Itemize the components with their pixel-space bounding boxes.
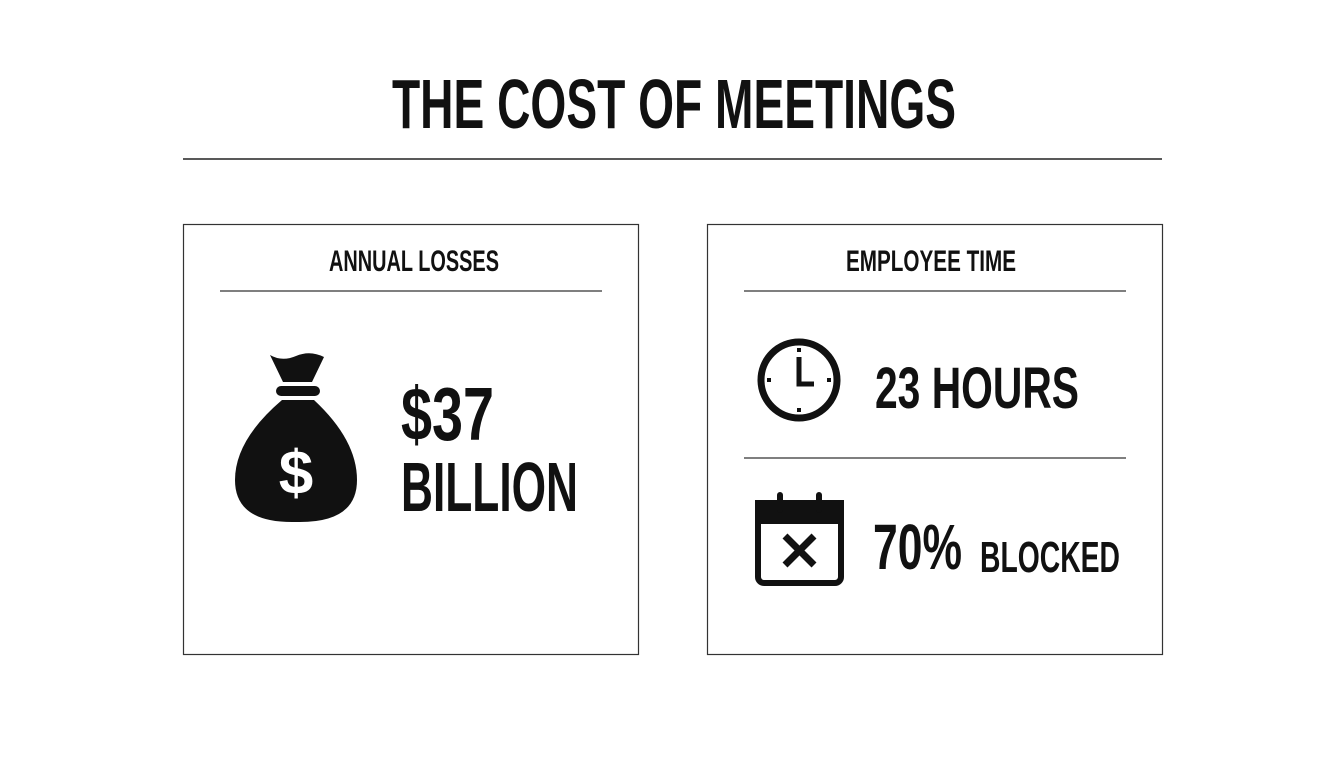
heading: annual losses: ANNUAL LOSSES bbox=[329, 245, 499, 278]
stat: 70% blocked: 70% bbox=[873, 511, 962, 583]
icon: money bag bbox=[235, 353, 357, 522]
stat: $37 billion bbox=[401, 372, 578, 526]
heading: employee time: EMPLOYEE TIME bbox=[846, 245, 1016, 278]
panel: employee time bbox=[708, 224, 1162, 654]
icon: calendar with x bbox=[758, 495, 841, 583]
panel: annual losses bbox=[184, 224, 638, 654]
icon: money bag: $ bbox=[279, 439, 313, 508]
stat: 70% blocked: BLOCKED bbox=[980, 533, 1120, 582]
stat: 23 hours: 23 HOURS bbox=[875, 356, 1079, 421]
stat: 70% blocked bbox=[873, 511, 1120, 583]
stat: $37 billion: $37 bbox=[401, 372, 494, 456]
icon: clock bbox=[761, 342, 837, 418]
stat: $37 billion: BILLION bbox=[401, 448, 578, 526]
title: THE COST OF MEETINGS bbox=[392, 65, 956, 143]
